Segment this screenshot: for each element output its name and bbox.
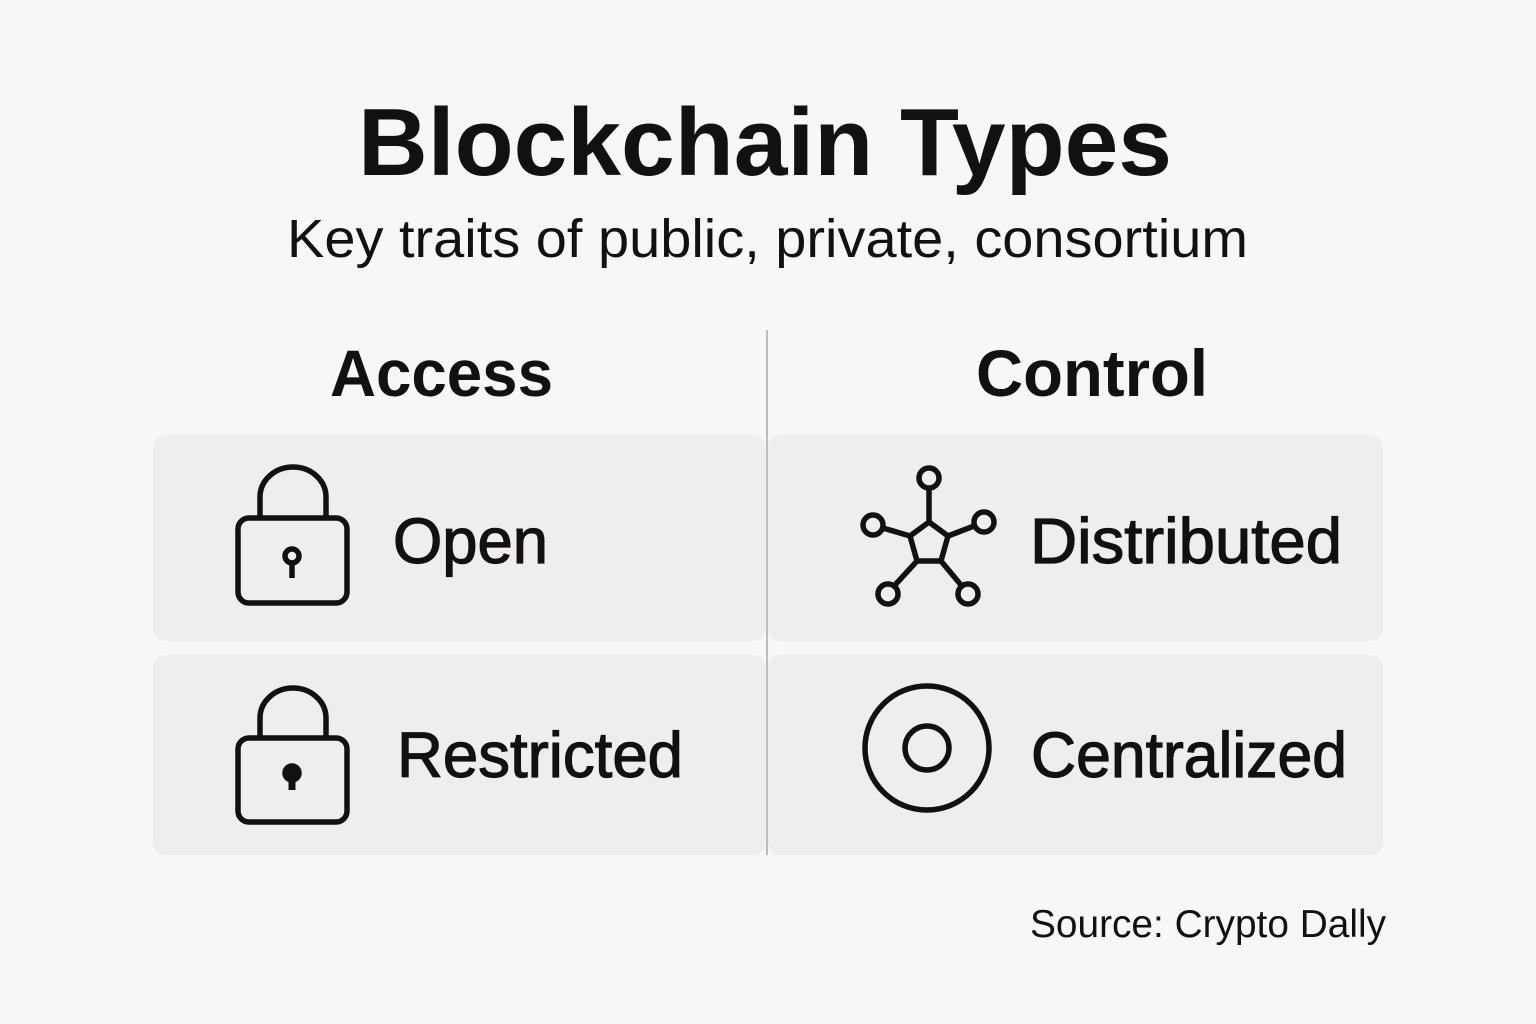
label: Centralized: Centralized: [1031, 719, 1347, 791]
icon: network: [863, 468, 994, 604]
heading: Access: Access: [330, 336, 553, 410]
label: Distributed: Distributed: [1030, 505, 1342, 577]
icon: centralized: [865, 686, 989, 810]
label: Open: Open: [393, 505, 548, 577]
panel: control distributed: [768, 435, 1383, 641]
source: Source: Crypto Dally: [1030, 903, 1386, 946]
panel: control centralized: [768, 655, 1383, 855]
heading: Control: Control: [976, 336, 1208, 410]
panel: access open: [153, 435, 766, 641]
icon: open lock: [238, 467, 347, 603]
title: Blockchain Types: [358, 89, 1172, 196]
icon: restricted lock: [238, 688, 347, 822]
label: Restricted: Restricted: [397, 719, 683, 791]
panel: access restricted: [153, 655, 766, 855]
subtitle: Key traits of public, private, consortium: [287, 209, 1248, 269]
